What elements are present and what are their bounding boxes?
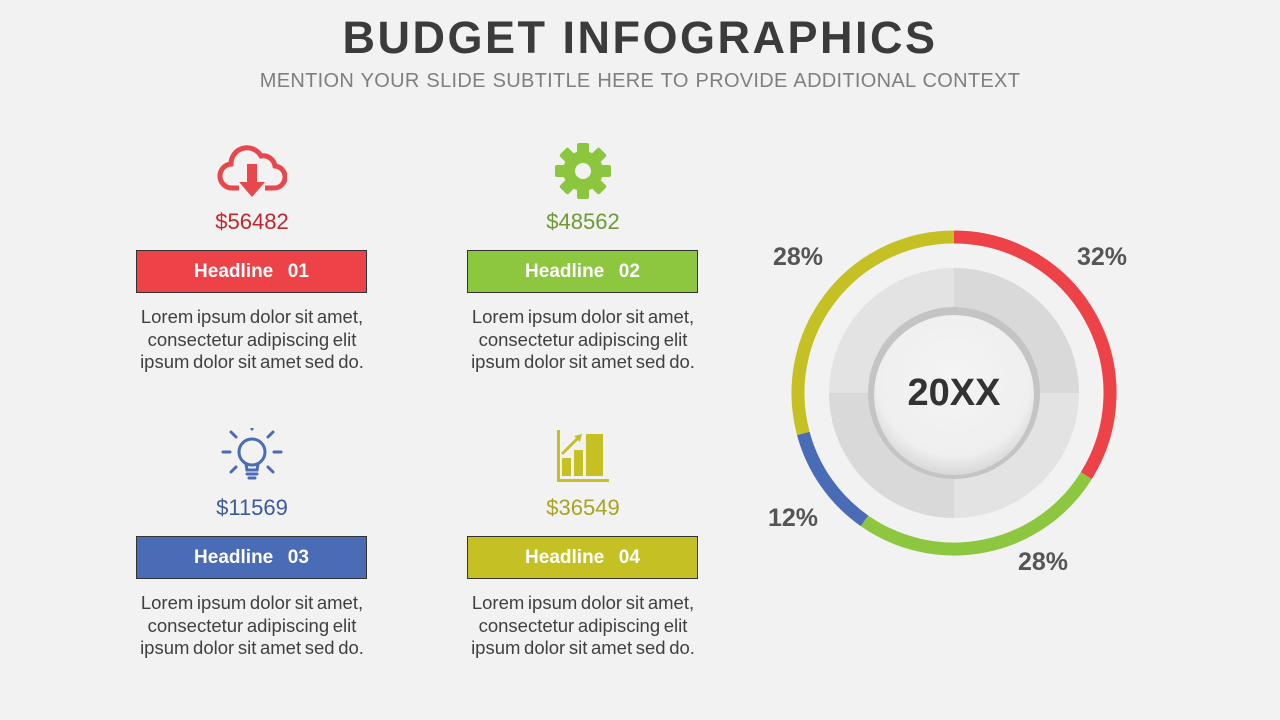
icon: cloud download xyxy=(217,145,287,197)
body text xyxy=(471,592,695,658)
ring segments xyxy=(798,237,1110,549)
headline box xyxy=(136,250,367,293)
amount: $48562 xyxy=(546,209,620,234)
body text xyxy=(471,306,695,372)
icon: gear xyxy=(555,143,611,199)
headline box: Headline 01 xyxy=(194,261,309,282)
label 12%: 12% xyxy=(768,504,818,532)
subtitle: MENTION YOUR SLIDE SUBTITLE HERE TO PROVIDE ADDITIONAL CONTEXT xyxy=(260,70,1020,92)
center circle: 20XX xyxy=(908,372,1001,414)
center circle xyxy=(868,307,1040,479)
body text xyxy=(140,592,364,658)
label 28% top-left: 28% xyxy=(773,243,823,271)
headline box: Headline 02 xyxy=(525,261,640,282)
body text: ipsum dolor sit amet sed do. xyxy=(471,637,695,658)
title: BUDGET INFOGRAPHICS xyxy=(342,12,938,63)
icon: light bulb xyxy=(222,428,282,480)
amount: $56482 xyxy=(215,209,289,234)
headline box xyxy=(467,536,698,579)
body text: Lorem ipsum dolor sit amet, xyxy=(472,306,694,327)
icon: bar chart xyxy=(557,430,609,482)
body text: Lorem ipsum dolor sit amet, xyxy=(472,592,694,613)
body text: consectetur adipiscing elit xyxy=(148,614,356,636)
gray quadrant disc xyxy=(829,268,1079,518)
body text: ipsum dolor sit amet sed do. xyxy=(140,637,364,658)
body text: consectetur adipiscing elit xyxy=(148,328,356,350)
panel: card 03 xyxy=(136,428,367,658)
amount: $36549 xyxy=(546,495,620,520)
panel: card 01 xyxy=(136,145,367,372)
panel: card 02 xyxy=(467,143,698,372)
label 32%: 32% xyxy=(1077,243,1127,271)
body text: Lorem ipsum dolor sit amet, xyxy=(141,306,363,327)
headline box xyxy=(136,536,367,579)
headline box: Headline 03 xyxy=(194,547,309,568)
headline box: Headline 04 xyxy=(525,547,640,568)
body text: Lorem ipsum dolor sit amet, xyxy=(141,592,363,613)
body text: consectetur adipiscing elit xyxy=(479,328,687,350)
headline box xyxy=(467,250,698,293)
label 28% bottom: 28% xyxy=(1018,548,1068,576)
amount: $11569 xyxy=(216,495,288,520)
body text: ipsum dolor sit amet sed do. xyxy=(140,351,364,372)
panel: card 04 xyxy=(467,430,698,658)
body text: consectetur adipiscing elit xyxy=(479,614,687,636)
body text: ipsum dolor sit amet sed do. xyxy=(471,351,695,372)
donut chart xyxy=(791,230,1117,556)
body text xyxy=(140,306,364,372)
